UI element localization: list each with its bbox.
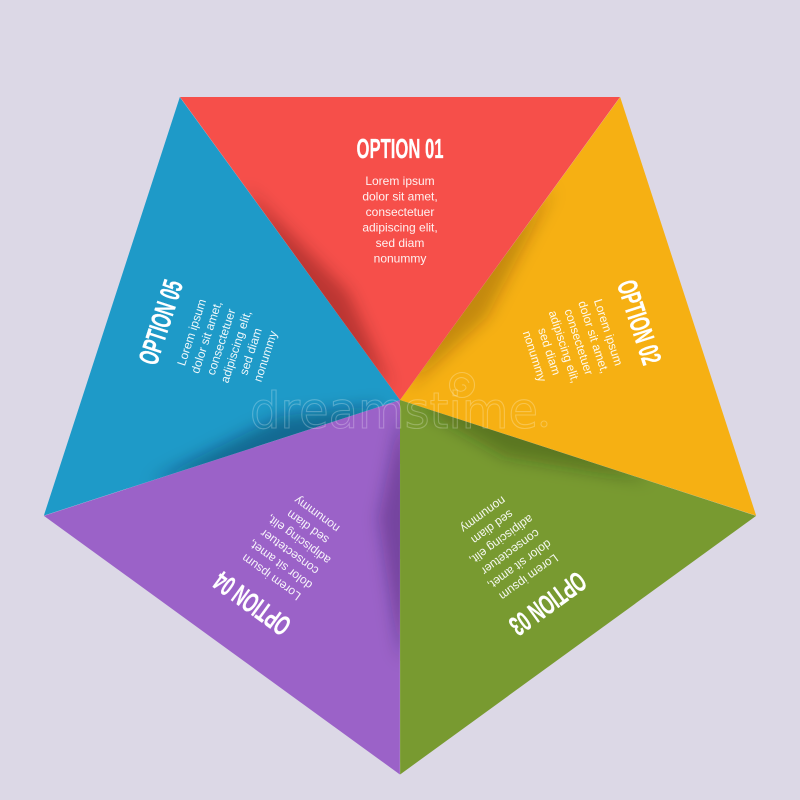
text block: option 02: sed diam <box>535 326 563 377</box>
panel: option 04 <box>44 400 400 774</box>
panel: option 01 <box>180 97 620 400</box>
heading: option 03: OPTION 03 <box>504 565 592 642</box>
text block: option 04: consectetuer <box>258 526 321 578</box>
text block: option 04: Lorem ipsum <box>239 551 303 603</box>
text block: option 04: adipiscing elit, <box>264 512 333 567</box>
panel: option 03 <box>400 400 756 774</box>
text block: option 03: nonummy <box>458 493 509 536</box>
text block: option 05: sed diam <box>237 326 265 377</box>
text block: option 04: nonummy <box>291 493 342 536</box>
text block: option 02: dolor sit amet, <box>575 299 612 375</box>
text block: option 05: Lorem ipsum <box>174 297 209 367</box>
heading: option 01: OPTION 01 <box>356 133 444 164</box>
text block: option 02: Lorem ipsum <box>591 297 626 367</box>
text block: option 04: dolor sit amet, <box>246 537 315 592</box>
text block: option 03: sed diam <box>468 507 516 547</box>
heading: option 02: OPTION 02 <box>611 276 667 368</box>
text block: option 03: adipiscing elit, <box>467 512 536 567</box>
panel: option 05 <box>44 97 400 516</box>
text block: option 01: consectetuer <box>366 205 434 219</box>
panel: option 02 <box>400 97 756 516</box>
text block: option 03: consectetuer <box>479 526 542 578</box>
heading: option 05: OPTION 05 <box>133 276 189 368</box>
text block: option 01: sed diam <box>376 236 424 250</box>
heading: option 04: OPTION 04 <box>208 565 296 642</box>
text block: option 02: adipiscing elit, <box>546 309 582 385</box>
text block: option 05: consectetuer <box>204 307 238 377</box>
text block: option 03: Lorem ipsum <box>497 551 561 603</box>
text block: option 02: consectetuer <box>562 307 596 377</box>
text block: option 01: dolor sit amet, <box>362 190 438 204</box>
text block: option 03: dolor sit amet, <box>485 537 554 592</box>
text block: option 05: dolor sit amet, <box>188 299 225 375</box>
text block: option 01: adipiscing elit, <box>362 220 438 234</box>
text block: option 05: adipiscing elit, <box>218 309 254 385</box>
text block: option 01: Lorem ipsum <box>365 174 435 188</box>
text block: option 05: nonummy <box>251 329 280 383</box>
text block: option 04: sed diam <box>284 507 332 547</box>
text block: option 02: nonummy <box>520 329 549 383</box>
watermark: dreamstime <box>250 382 538 440</box>
text block: option 01: nonummy <box>374 252 426 266</box>
